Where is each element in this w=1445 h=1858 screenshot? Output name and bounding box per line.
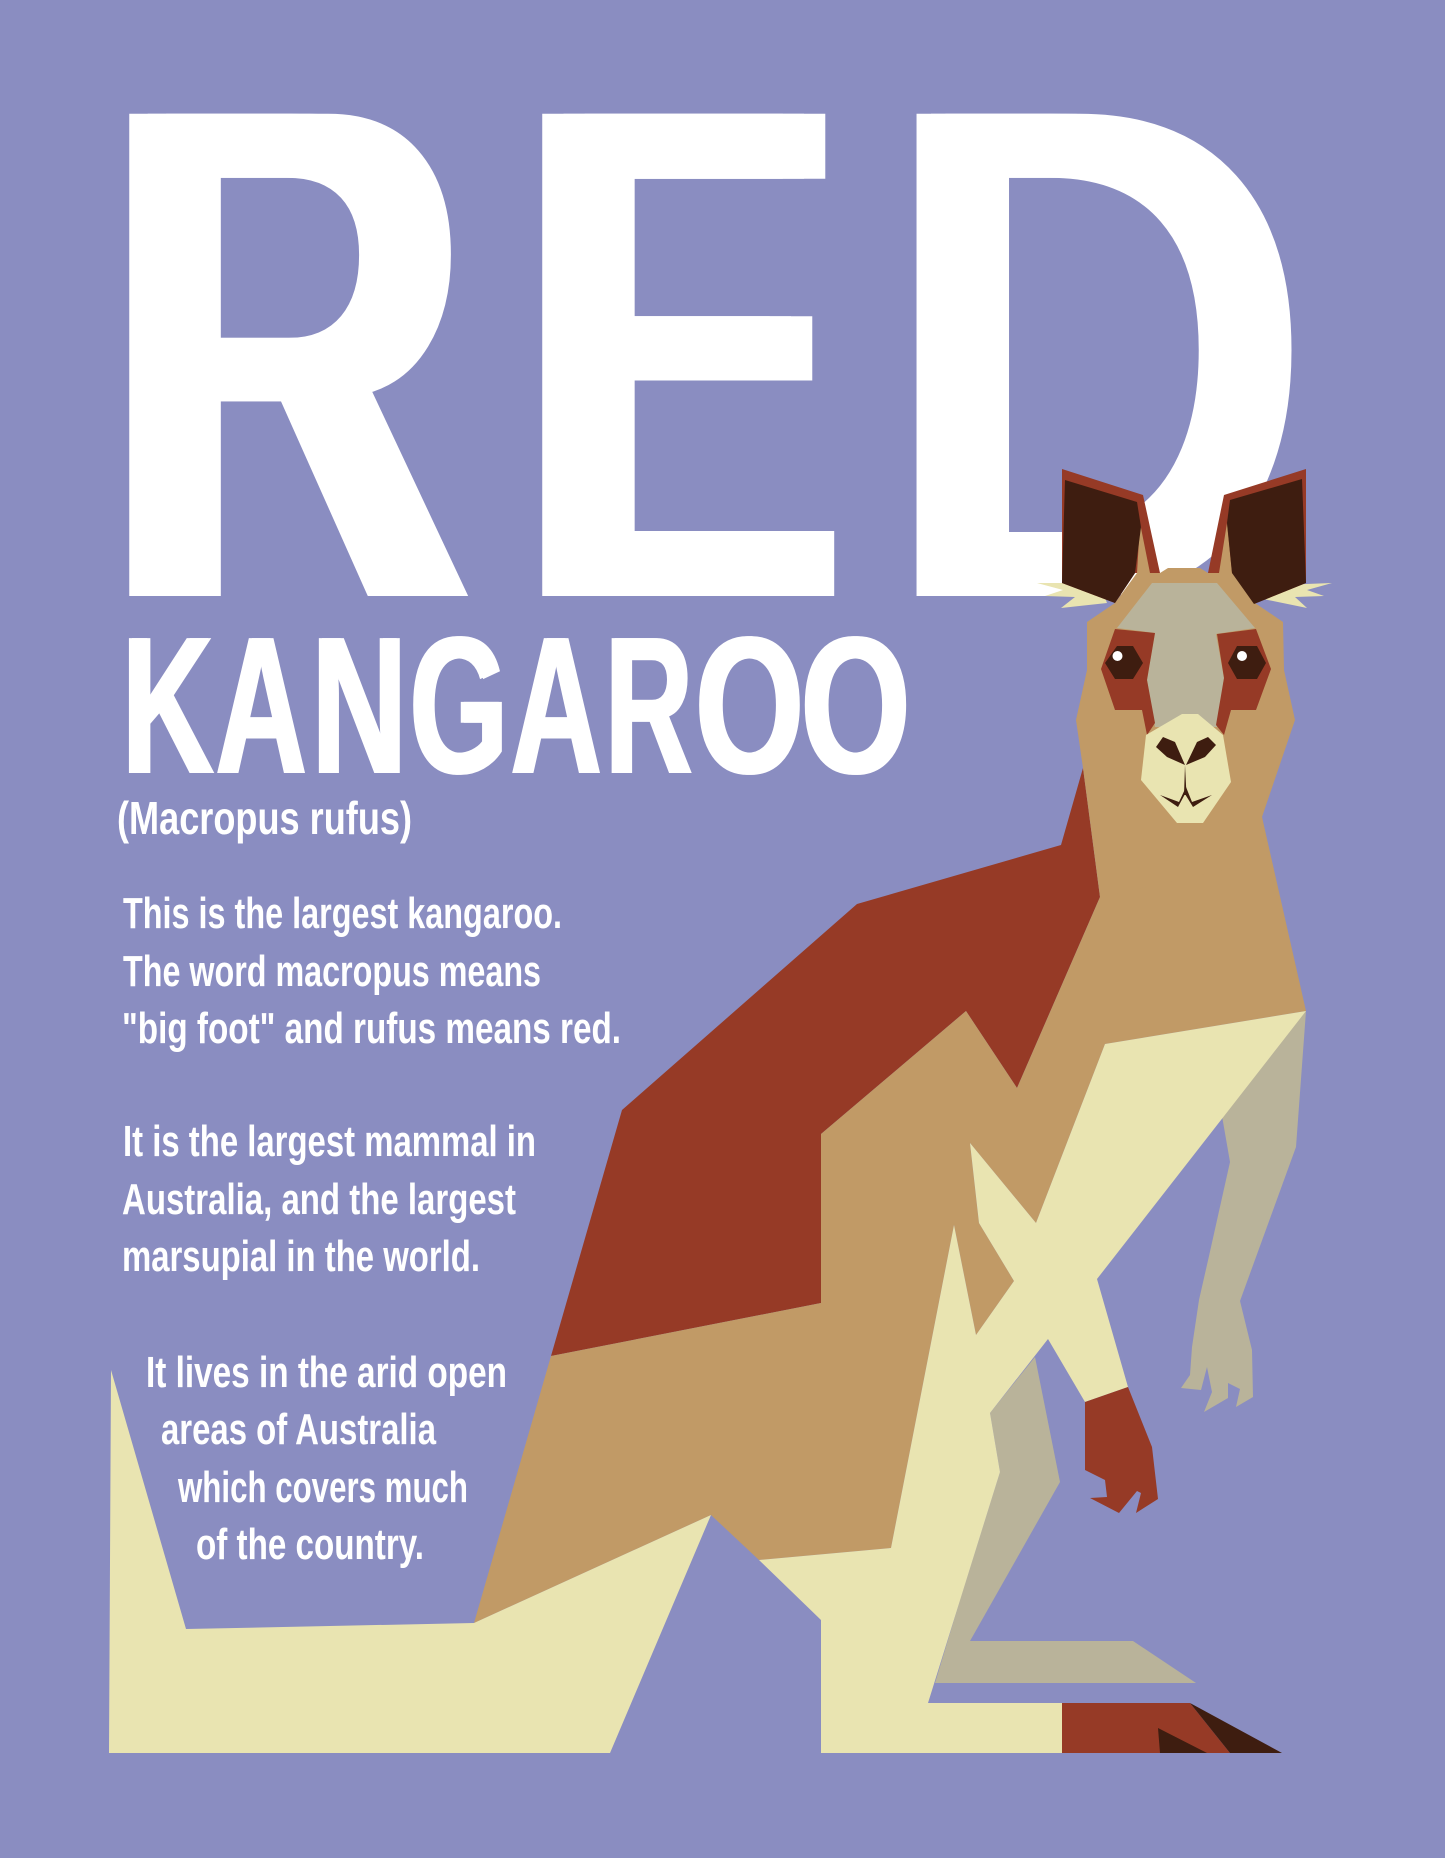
text block: largest mammal [122, 1117, 536, 1281]
eye highlight left [1112, 651, 1122, 661]
belly, near leg and arm [759, 1011, 1306, 1753]
body [474, 800, 1306, 1623]
eye left [1105, 646, 1143, 679]
text block: largest mammal: marsupial in the world. [122, 1232, 480, 1281]
head [1076, 523, 1295, 897]
eye right [1228, 646, 1266, 679]
subtitle: KANGAROO: O [693, 597, 802, 816]
muzzle [1141, 714, 1231, 823]
ear inner left [1062, 480, 1141, 603]
whiskers left [1037, 583, 1107, 608]
eye patch left [1101, 629, 1155, 735]
philtrum [1184, 765, 1186, 795]
tail [109, 1370, 711, 1753]
text block: habitat [146, 1348, 507, 1569]
text block: habitat: which covers much [177, 1463, 468, 1512]
near paw [1085, 1387, 1158, 1513]
foot [1062, 1703, 1230, 1753]
subtitle: KANGAROO: A [509, 596, 600, 815]
ear frame left [1062, 469, 1160, 603]
eye patch right [1216, 629, 1271, 735]
title: RED [94, 0, 1284, 735]
illustration: kangaroo [109, 469, 1332, 1753]
back fur [551, 768, 1100, 1356]
subtitle: KANGAROO: N [310, 597, 406, 815]
ear inner right [1227, 479, 1306, 604]
whiskers right [1263, 583, 1332, 608]
toe shadow small [1158, 1728, 1207, 1753]
face blaze [1117, 583, 1255, 727]
subtitle: KANGAROO: O [799, 596, 909, 815]
subtitle: KANGAROO: R [604, 595, 691, 815]
text block: largest mammal: Australia, and the largest [122, 1175, 516, 1224]
text block: largest kangaroo: The word macropus means [123, 947, 541, 996]
subtitle: KANGAROO: G [408, 596, 507, 815]
subtitle: KANGAROO: A [214, 596, 305, 815]
text block: largest kangaroo: "big foot" and rufus means red. [122, 1004, 621, 1053]
text block: habitat: areas of Australia [161, 1405, 436, 1454]
toe shadow [1190, 1703, 1282, 1753]
eye highlight right [1237, 651, 1247, 661]
text block: habitat: of the country. [196, 1520, 424, 1569]
ear frame right [1208, 469, 1306, 604]
nostril right [1186, 737, 1216, 765]
subtitle: KANGAROO: K [120, 596, 212, 816]
subtitle: KANGAROO [120, 595, 909, 816]
far leg [935, 1357, 1196, 1683]
far arm [1181, 1011, 1306, 1412]
text block: largest kangaroo [122, 889, 621, 1053]
mouth [1160, 787, 1212, 807]
text block: largest kangaroo: This is the largest kangaroo. [123, 889, 562, 938]
nostril left [1156, 737, 1185, 765]
text block: habitat: It lives in the arid open [146, 1348, 507, 1397]
scientific name: (Macropus rufus) [117, 792, 412, 844]
text block: largest mammal: It is the largest mammal in [123, 1117, 536, 1166]
